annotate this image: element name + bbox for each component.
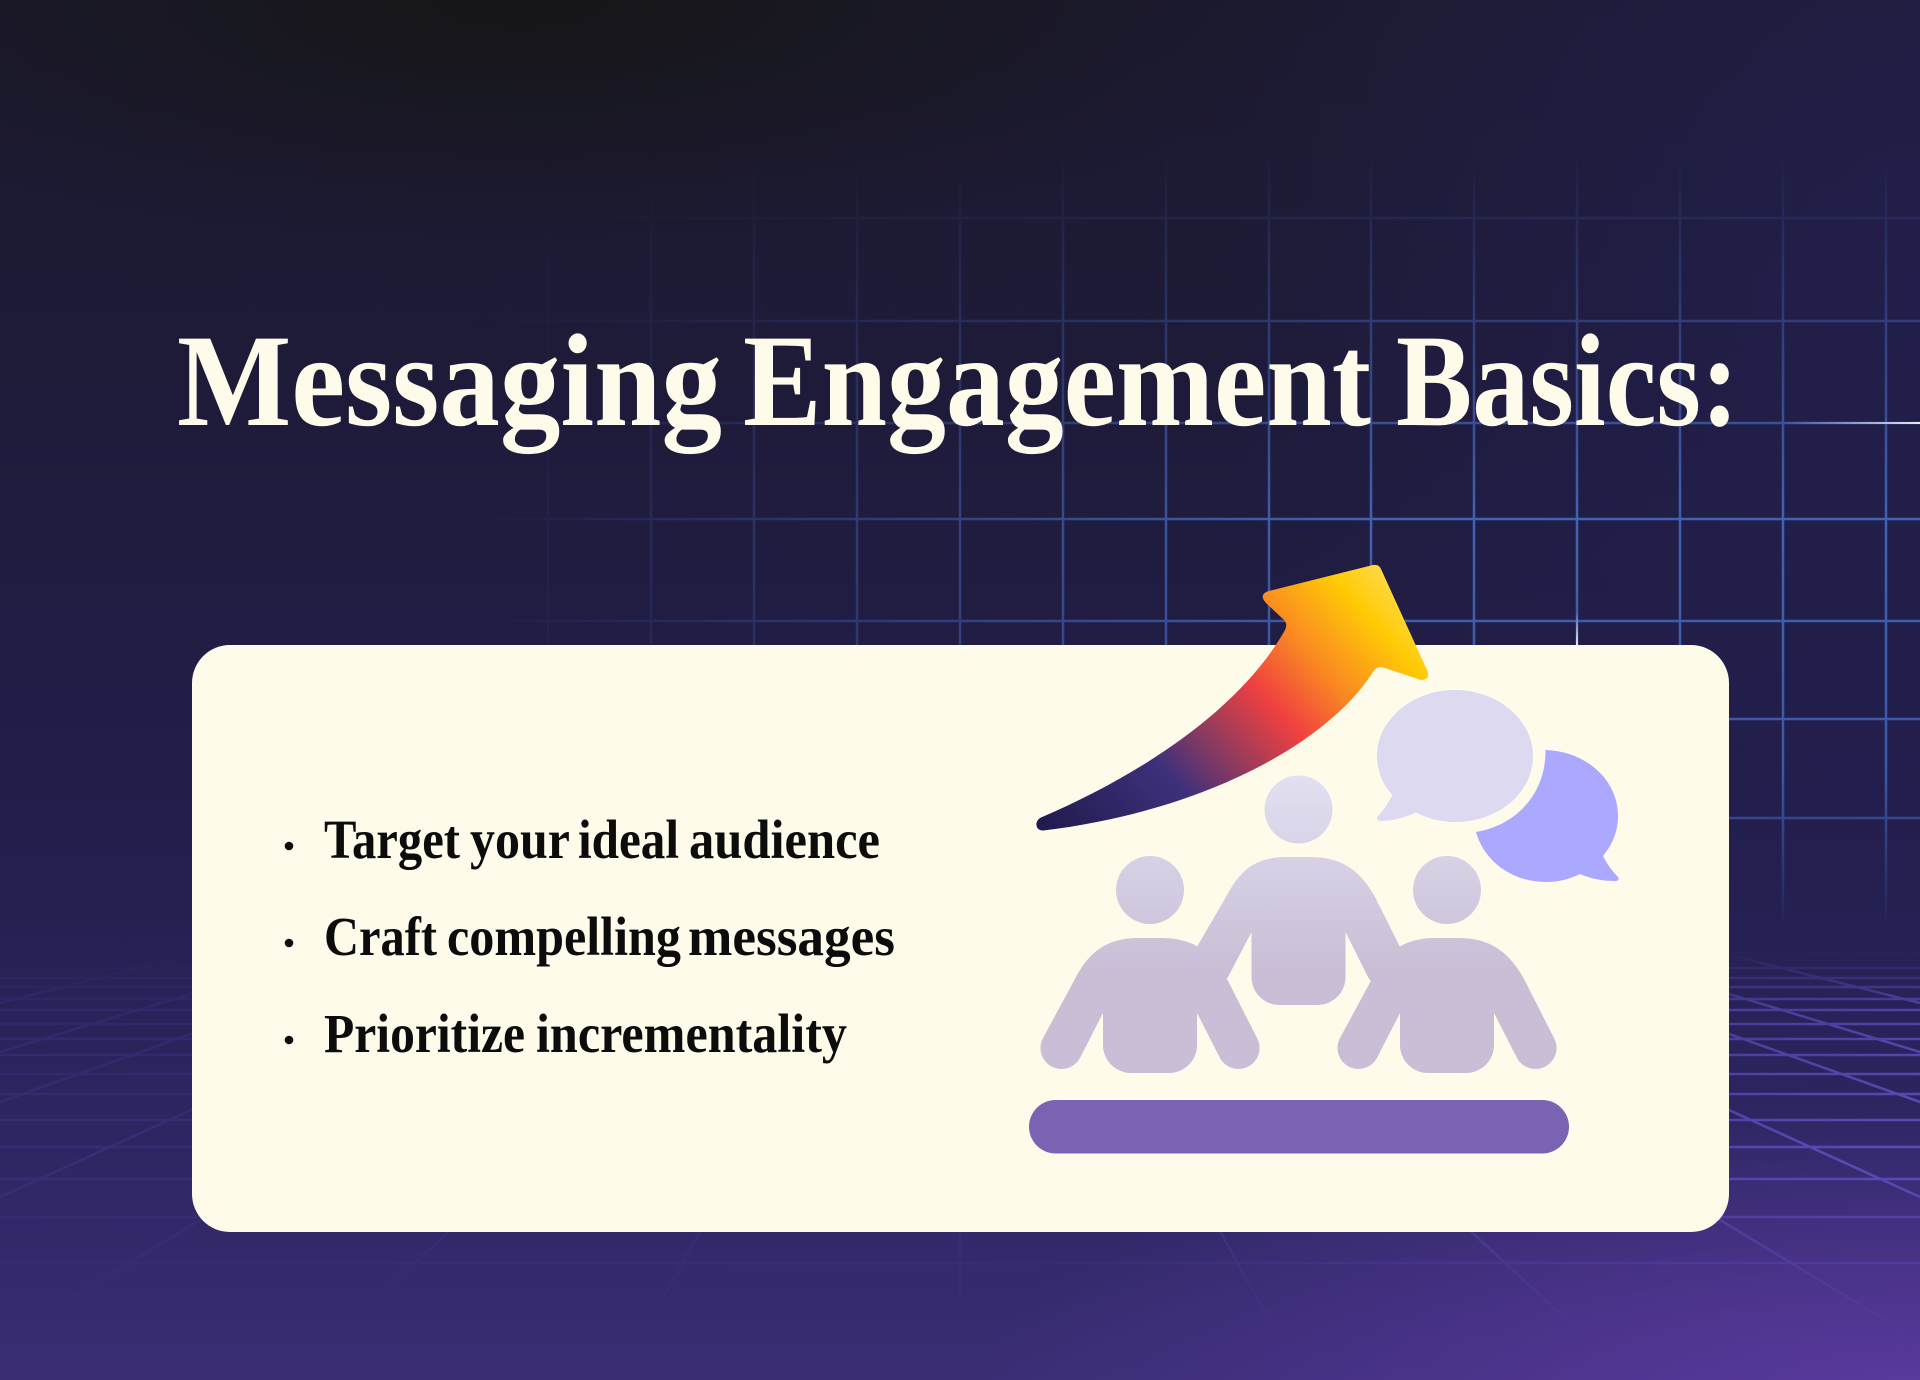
background wall grid (538, 176, 1920, 913)
panel: content card (192, 645, 1729, 1232)
bullet item: audience: your (470, 809, 570, 870)
icon: people group (1040, 776, 1557, 1073)
grid highlight: vertical glint (1576, 612, 1578, 645)
person: right (1337, 856, 1557, 1073)
grid highlight: horizontal glint (1780, 422, 1920, 424)
person: left (1040, 856, 1260, 1073)
bullet list (285, 809, 895, 1064)
title: Messaging (177, 307, 722, 454)
bullet item: messages: compelling (447, 906, 681, 967)
person: center (1188, 776, 1408, 1005)
title: Engagement (743, 307, 1371, 454)
bullet item: messages: messages (688, 906, 895, 967)
illustration: growing audience (1029, 565, 1619, 1154)
bullet item: messages: Craft (324, 906, 438, 967)
background floor grid (0, 958, 1920, 1302)
bullet item: incrementality (285, 1003, 847, 1064)
title: Basics: (1396, 307, 1739, 454)
icon: rising arrow (1036, 565, 1428, 831)
bullet item: incrementality: Prioritize (324, 1003, 525, 1064)
bullet item: audience (285, 809, 880, 870)
icon: periwinkle speech bubble (1476, 750, 1619, 882)
bullet item: messages (285, 906, 895, 967)
bullet item: audience: audience (689, 809, 880, 870)
bullet item: incrementality: incrementality (536, 1003, 847, 1064)
icon: table bar (1029, 1100, 1569, 1154)
bullet item: audience: Target (324, 809, 461, 870)
bullet item: audience: ideal (578, 809, 679, 870)
icon: light speech bubble (1377, 690, 1533, 822)
